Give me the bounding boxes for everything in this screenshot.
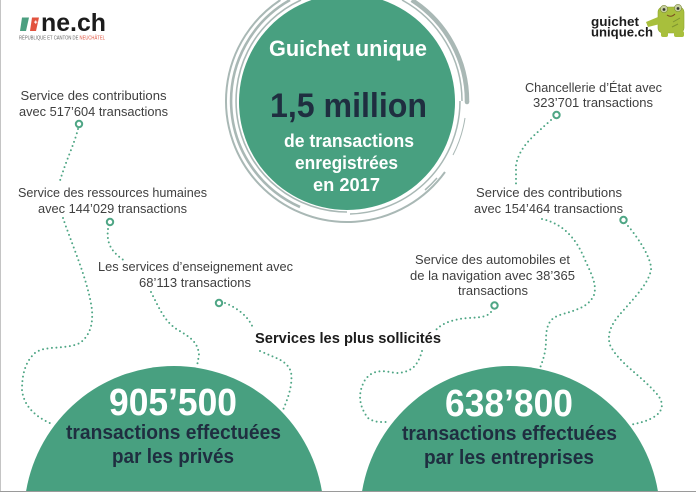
connector: enseignement [216, 300, 291, 410]
logo: guichet unique: unique.ch [591, 26, 653, 40]
label: Chancellerie d'État [525, 80, 662, 110]
connector: contributions 154'464 [609, 217, 662, 425]
label: services d'enseignement [98, 259, 293, 290]
connector: ressources humaines [107, 219, 199, 366]
logo: guichet unique [591, 4, 684, 39]
panel: entreprises [362, 366, 658, 491]
caption: de transactions enregistrées en 2017: de transactions [284, 131, 414, 151]
heading: Guichet unique: Guichet unique [269, 36, 427, 61]
label: Service des contributions 154'464: avec 154’464 transactions [474, 201, 623, 216]
figure: 638'800: 638’800 [445, 383, 573, 425]
caption: de transactions enregistrées en 2017: enregistrées [295, 153, 398, 173]
connector: contributions 517'604 [22, 121, 92, 424]
connector: automobiles [360, 302, 498, 422]
label: Service des automobiles: de la navigation avec 38’365 [410, 268, 575, 283]
label: Chancellerie d'État: Chancellerie d’État avec [525, 80, 662, 95]
rings [226, 0, 469, 222]
key figure: 1,5 million: 1,5 million [270, 87, 427, 125]
label: Service des ressources humaines: avec 144’029 transactions [38, 201, 187, 216]
central circle with rings [226, 0, 469, 222]
caption: transactions par les entreprises [402, 422, 617, 469]
label: Chancellerie d'État: 323’701 transactions [533, 95, 653, 110]
label: Service des contributions 517'604: Service des contributions [20, 88, 167, 103]
caption: transactions par les privés: transactions effectuées [66, 421, 281, 444]
caption: de transactions enregistrées en 2017 [284, 131, 414, 195]
caption: transactions par les entreprises: par les entreprises [424, 446, 594, 469]
figure: 905'500: 905’500 [109, 382, 237, 424]
label: Service des ressources humaines: Service des ressources humaines [18, 185, 207, 200]
label: Service des contributions 154'464: Service des contributions [476, 185, 622, 200]
caption: transactions par les privés: par les privés [112, 445, 234, 468]
label: Service des contributions 154'464 [474, 185, 623, 216]
label: Service des contributions 517'604: avec 517’604 transactions [19, 104, 168, 119]
logo: ne.ch: ne.ch [41, 9, 106, 37]
label: Service des automobiles: transactions [458, 283, 528, 298]
caption: transactions par les entreprises: transactions effectuées [402, 422, 617, 445]
caption: de transactions enregistrées en 2017: en 2017 [313, 175, 380, 195]
icon: green mascot [646, 4, 684, 37]
label: Service des automobiles [410, 252, 575, 298]
logo: ne.ch: RÉPUBLIQUE ET CANTON DE NEUCHÂTEL [19, 34, 105, 42]
logo: ne.ch [19, 9, 106, 42]
caption: transactions par les privés [66, 421, 281, 468]
label: Service des automobiles: Service des automobiles et [415, 252, 570, 267]
connector: chancellerie [516, 112, 595, 368]
label: Service des ressources humaines [18, 185, 207, 216]
label: services d'enseignement: 68’113 transactions [139, 275, 251, 290]
label: Service des contributions 517'604 [19, 88, 168, 119]
panel: privés [26, 366, 322, 491]
label: services d'enseignement: Les services d’enseignement avec [98, 259, 293, 274]
logo: guichet unique: guichet [591, 15, 640, 29]
green disc [239, 0, 455, 210]
heading: Services les plus sollicités: Services les plus sollicités [255, 330, 441, 347]
